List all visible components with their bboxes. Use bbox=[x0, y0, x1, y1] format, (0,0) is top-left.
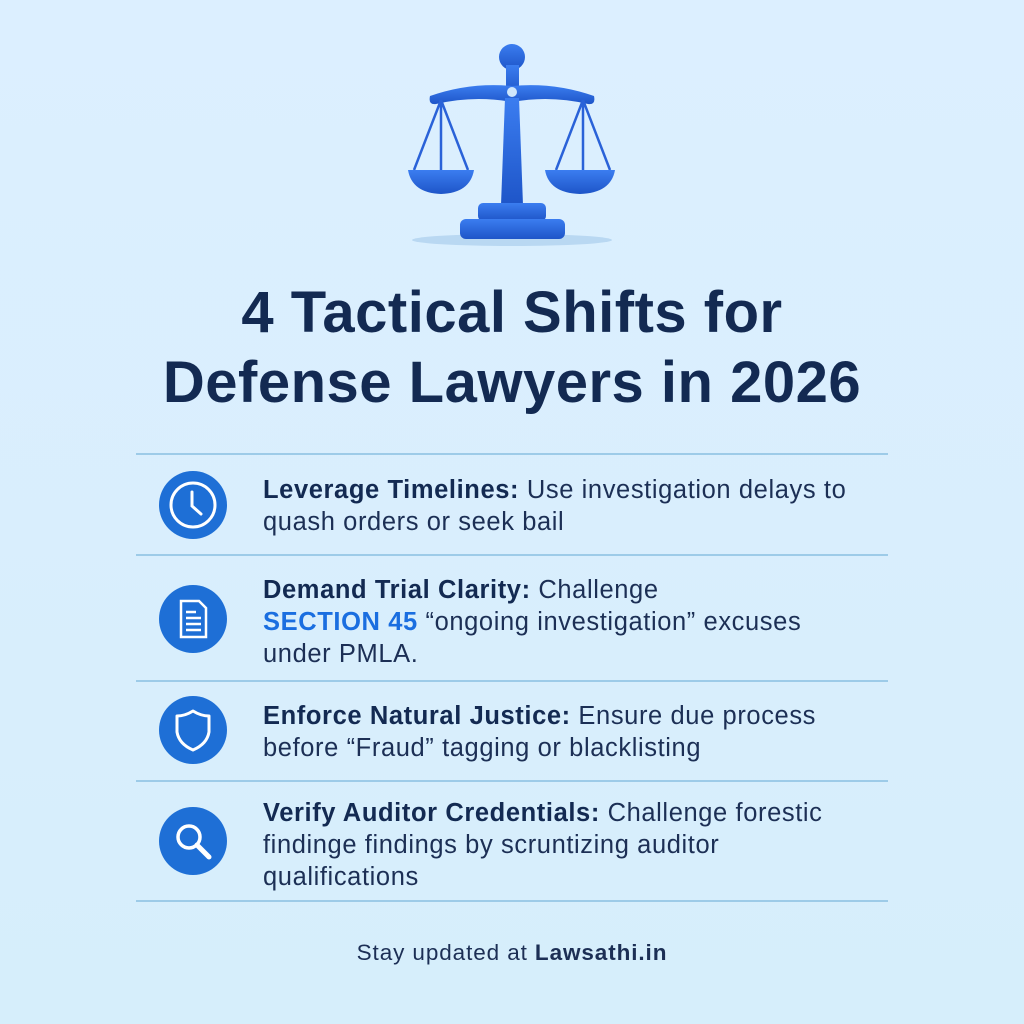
item 4 text bbox=[263, 799, 823, 891]
icon: scales of justice bbox=[408, 44, 615, 246]
title bbox=[163, 280, 861, 415]
item 4 text: qualifications bbox=[263, 863, 419, 891]
item 2 text bbox=[263, 576, 801, 668]
item 1 text bbox=[263, 476, 846, 536]
item 1 text: Leverage Timelines: Use investigation delays to bbox=[263, 476, 846, 504]
item 2 text: Demand Trial Clarity: Challenge bbox=[263, 576, 659, 604]
item 4 text: Verify Auditor Credentials: Challenge forestic bbox=[263, 799, 823, 827]
icon: clock bbox=[159, 471, 227, 539]
icon: magnifier bbox=[159, 807, 227, 875]
title: Defense Lawyers in 2026 bbox=[163, 350, 861, 415]
item 4 text: findinge findings by scruntizing auditor bbox=[263, 831, 719, 859]
item 3 text: before “Fraud” tagging or blacklisting bbox=[263, 734, 701, 762]
icon: shield bbox=[159, 696, 227, 764]
item 1 text: quash orders or seek bail bbox=[263, 508, 564, 536]
item 2 text: SECTION 45 “ongoing investigation” excuses bbox=[263, 608, 801, 636]
item 3 text bbox=[263, 702, 816, 762]
footer: Stay updated at Lawsathi.in bbox=[357, 940, 667, 965]
icon: document bbox=[159, 585, 227, 653]
item 2 text: under PMLA. bbox=[263, 640, 418, 668]
item 3 text: Enforce Natural Justice: Ensure due process bbox=[263, 702, 816, 730]
title: 4 Tactical Shifts for bbox=[241, 280, 783, 345]
